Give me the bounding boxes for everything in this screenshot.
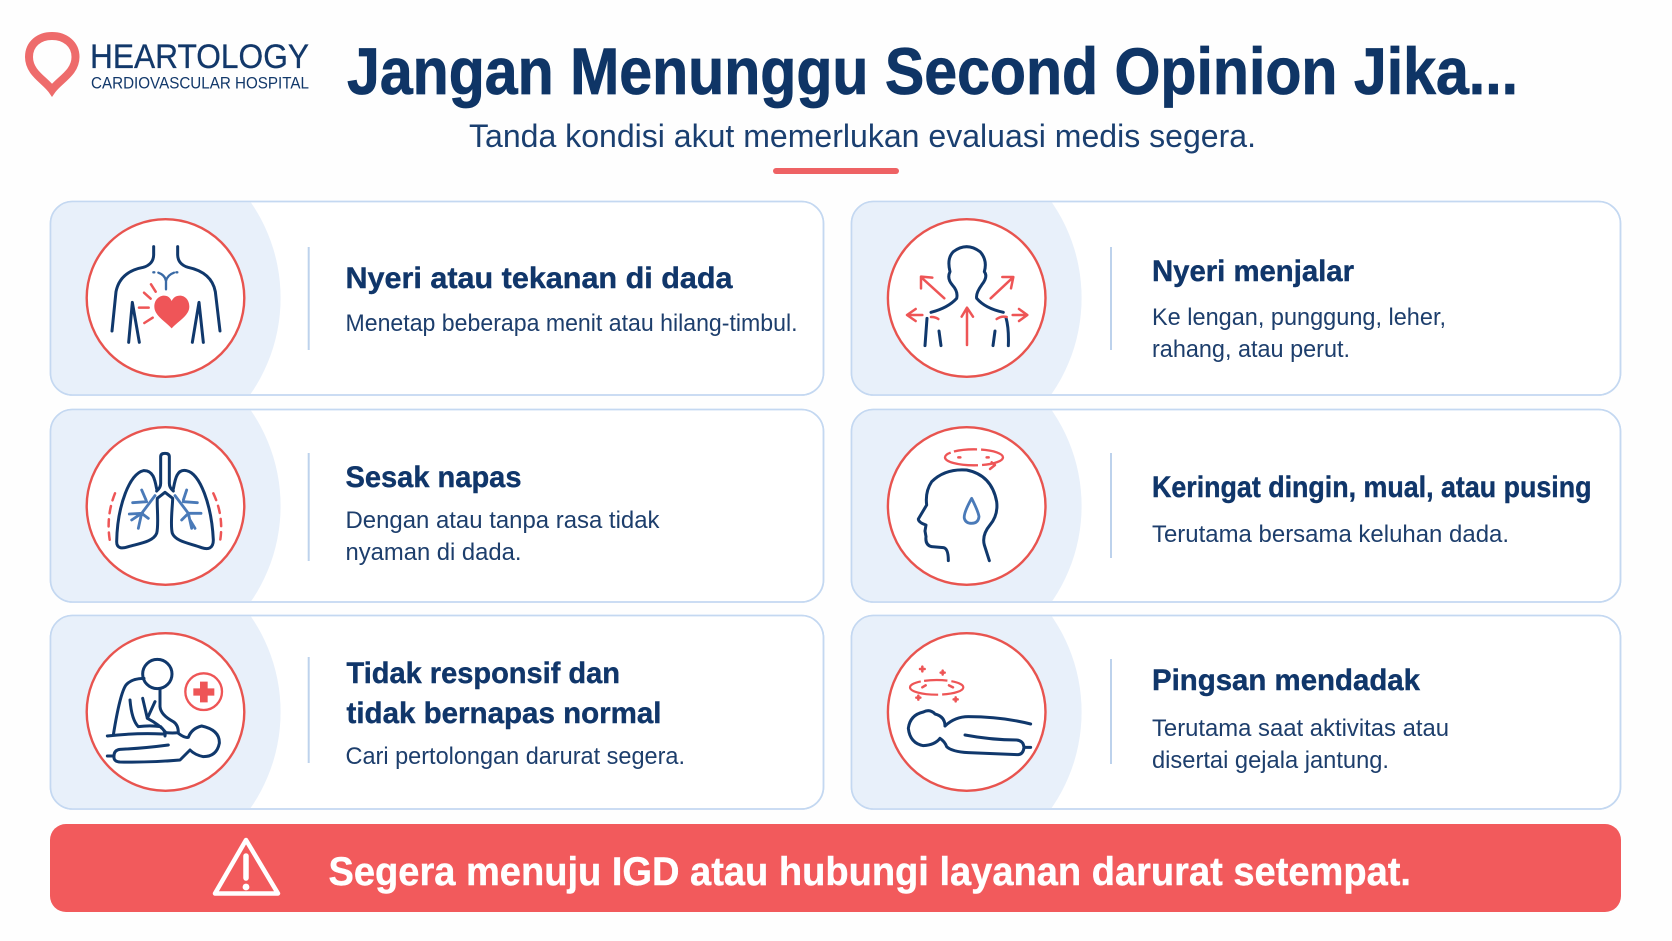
panel: keringat dingin <box>850 408 1622 603</box>
callout: emergency banner <box>50 824 1621 912</box>
description: Cari pertolongan darurat segera. <box>346 743 685 770</box>
icon: CPR <box>107 659 222 762</box>
panel: pingsan <box>850 614 1622 810</box>
panel: tidak responsif: tidak bernapas normal <box>346 697 662 730</box>
heading: Tidak responsif dan <box>346 657 620 690</box>
title: Jangan Menunggu Second Opinion Jika... <box>347 34 1518 108</box>
heading: Nyeri menjalar <box>1152 255 1354 288</box>
panel: nyeri menjalar: rahang, atau perut. <box>1152 336 1350 363</box>
description: Terutama bersama keluhan dada. <box>1152 521 1509 548</box>
icon: fainted person <box>908 667 1031 755</box>
icon: head with sweat drop <box>918 449 1003 561</box>
description: Ke lengan, punggung, leher, <box>1152 304 1446 331</box>
icon: chest with heart <box>112 247 220 342</box>
heading: Nyeri atau tekanan di dada <box>346 262 733 295</box>
logo subtitle: CARDIOVASCULAR HOSPITAL <box>91 74 309 92</box>
panel: sesak napas <box>50 408 824 603</box>
panel: tidak responsif <box>50 614 824 810</box>
logo name: HEARTOLOGY <box>90 38 309 76</box>
icon: lungs <box>109 453 221 549</box>
icon: radiating pain <box>907 247 1027 346</box>
banner text: Segera menuju IGD atau hubungi layanan darurat setempat. <box>328 850 1411 894</box>
logo: Heartology <box>29 36 309 92</box>
icon: logo pin <box>29 36 76 90</box>
icon: warning triangle <box>215 840 278 894</box>
description: Menetap beberapa menit atau hilang-timbul. <box>346 310 798 337</box>
title accent bar <box>773 168 899 174</box>
description: Dengan atau tanpa rasa tidak <box>346 507 660 534</box>
panel: nyeri dada <box>50 200 824 396</box>
panel: nyeri menjalar <box>850 200 1622 396</box>
panel: pingsan: disertai gejala jantung. <box>1152 747 1389 774</box>
description: Terutama saat aktivitas atau <box>1152 715 1449 742</box>
heading: Pingsan mendadak <box>1152 664 1420 697</box>
panel: sesak napas: nyaman di dada. <box>346 539 522 566</box>
subtitle: Tanda kondisi akut memerlukan evaluasi medis segera. <box>469 118 1256 154</box>
heading: Keringat dingin, mual, atau pusing <box>1152 471 1592 504</box>
heading: Sesak napas <box>346 461 522 494</box>
